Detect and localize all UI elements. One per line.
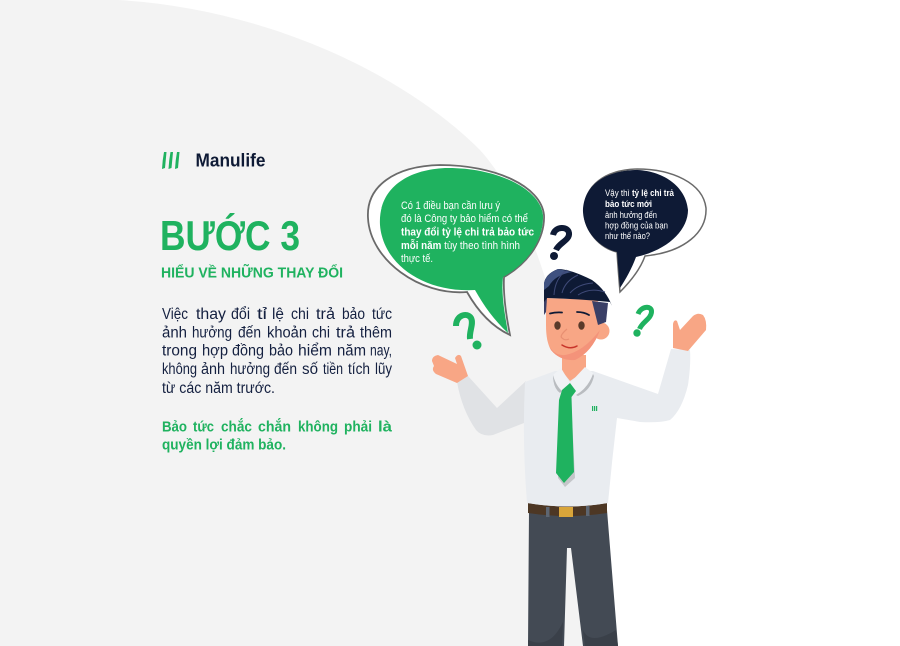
logo wordmark: Manulife [196, 150, 266, 170]
bubble text: hợp đồng của bạn [605, 220, 668, 230]
bubble text: Vậy thì tỷ lệ chi trả [605, 188, 675, 198]
bubble text: bảo tức mới [605, 199, 652, 209]
body text: không [162, 361, 197, 378]
body text: bảo [269, 342, 293, 360]
nose [561, 329, 569, 340]
body text: ảnh [162, 324, 187, 342]
bubble text [605, 188, 675, 241]
body text: ảnh [201, 361, 225, 378]
body text: lệ [272, 306, 284, 323]
green note: chắn [258, 418, 291, 436]
right hand [673, 314, 706, 351]
bubble text: mỗi năm tùy theo tình hình [401, 239, 520, 252]
body text: bảo [342, 306, 365, 323]
bubble text: đó là Công ty bảo hiểm có thể [401, 213, 528, 225]
body text: năm [337, 342, 366, 360]
belt [528, 503, 607, 517]
mouth [562, 345, 577, 348]
green note: Bảo [162, 418, 187, 436]
body text: thay [196, 306, 226, 323]
speech bubble: navy [583, 169, 706, 292]
body text [162, 306, 392, 397]
sideburn [592, 301, 608, 325]
body text: trả [336, 324, 355, 342]
speech bubble: green [368, 165, 544, 335]
body text: trả [316, 306, 335, 323]
green note: quyền lợi đảm bảo. [162, 436, 286, 454]
subheading: HIỂU VỀ NHỮNG THAY ĐỔI [161, 264, 343, 282]
collar [553, 367, 593, 395]
shirt [524, 349, 690, 506]
bubble text: ảnh hưởng đến [605, 210, 657, 220]
ear [592, 322, 610, 340]
pants [528, 510, 618, 646]
body text: chi [291, 306, 309, 323]
bubble text [401, 200, 534, 265]
bubble outline [368, 165, 544, 335]
body text: tiền [323, 361, 343, 378]
body text: đến [274, 361, 297, 378]
hair [544, 269, 612, 315]
body text: hiểm [298, 342, 332, 360]
bubble text: Có 1 điều bạn cần lưu ý [401, 200, 500, 212]
icon: shirt logo [592, 406, 597, 411]
body text: tích [348, 361, 370, 378]
green note: là [378, 418, 393, 436]
heading: BƯỚC 3 [160, 211, 300, 259]
left hand [432, 355, 468, 383]
body text: số [302, 361, 318, 378]
body text: Việc [162, 306, 188, 323]
body text: trong [162, 342, 197, 360]
eyebrows [550, 312, 589, 315]
body text: tức [372, 306, 392, 323]
body text: đổi [231, 306, 250, 323]
body text: nay, [370, 342, 392, 360]
body text: đến [238, 324, 261, 342]
body text: tỉ [257, 306, 268, 323]
body text: hưởng [192, 324, 232, 342]
body text: khoản [267, 324, 307, 342]
bubble text: như thế nào? [605, 231, 650, 241]
green note: chắc [221, 418, 252, 436]
tie [556, 383, 576, 487]
bubble outline [584, 169, 706, 292]
body text: hợp [202, 342, 228, 360]
body text: hưởng [230, 361, 270, 378]
icon: green question mark right [633, 307, 652, 337]
eyes [554, 321, 585, 330]
body text: thêm [360, 324, 392, 342]
body text: chi [312, 324, 330, 342]
background grey shape [0, 0, 590, 646]
icon: green question mark left [456, 315, 482, 350]
green note: không [298, 418, 338, 436]
icon: Manulife bars [162, 152, 180, 169]
green note: tức [193, 418, 214, 436]
green note: phải [344, 418, 372, 436]
bubble fill [380, 168, 543, 333]
person [432, 269, 706, 646]
bubble fill [583, 170, 688, 288]
body text: đồng [232, 342, 264, 360]
body text: từ các năm trước. [162, 380, 275, 397]
body text: lũy [375, 361, 392, 378]
neck [562, 355, 586, 381]
left arm [457, 376, 526, 435]
face [546, 298, 600, 360]
logo [162, 150, 266, 170]
green note [162, 418, 393, 454]
icon: navy question mark [550, 228, 569, 260]
bubble text: thay đổi tỷ lệ chi trả bảo tức [401, 226, 534, 238]
belt buckle [559, 507, 573, 517]
bubble text: thực tế. [401, 253, 433, 265]
